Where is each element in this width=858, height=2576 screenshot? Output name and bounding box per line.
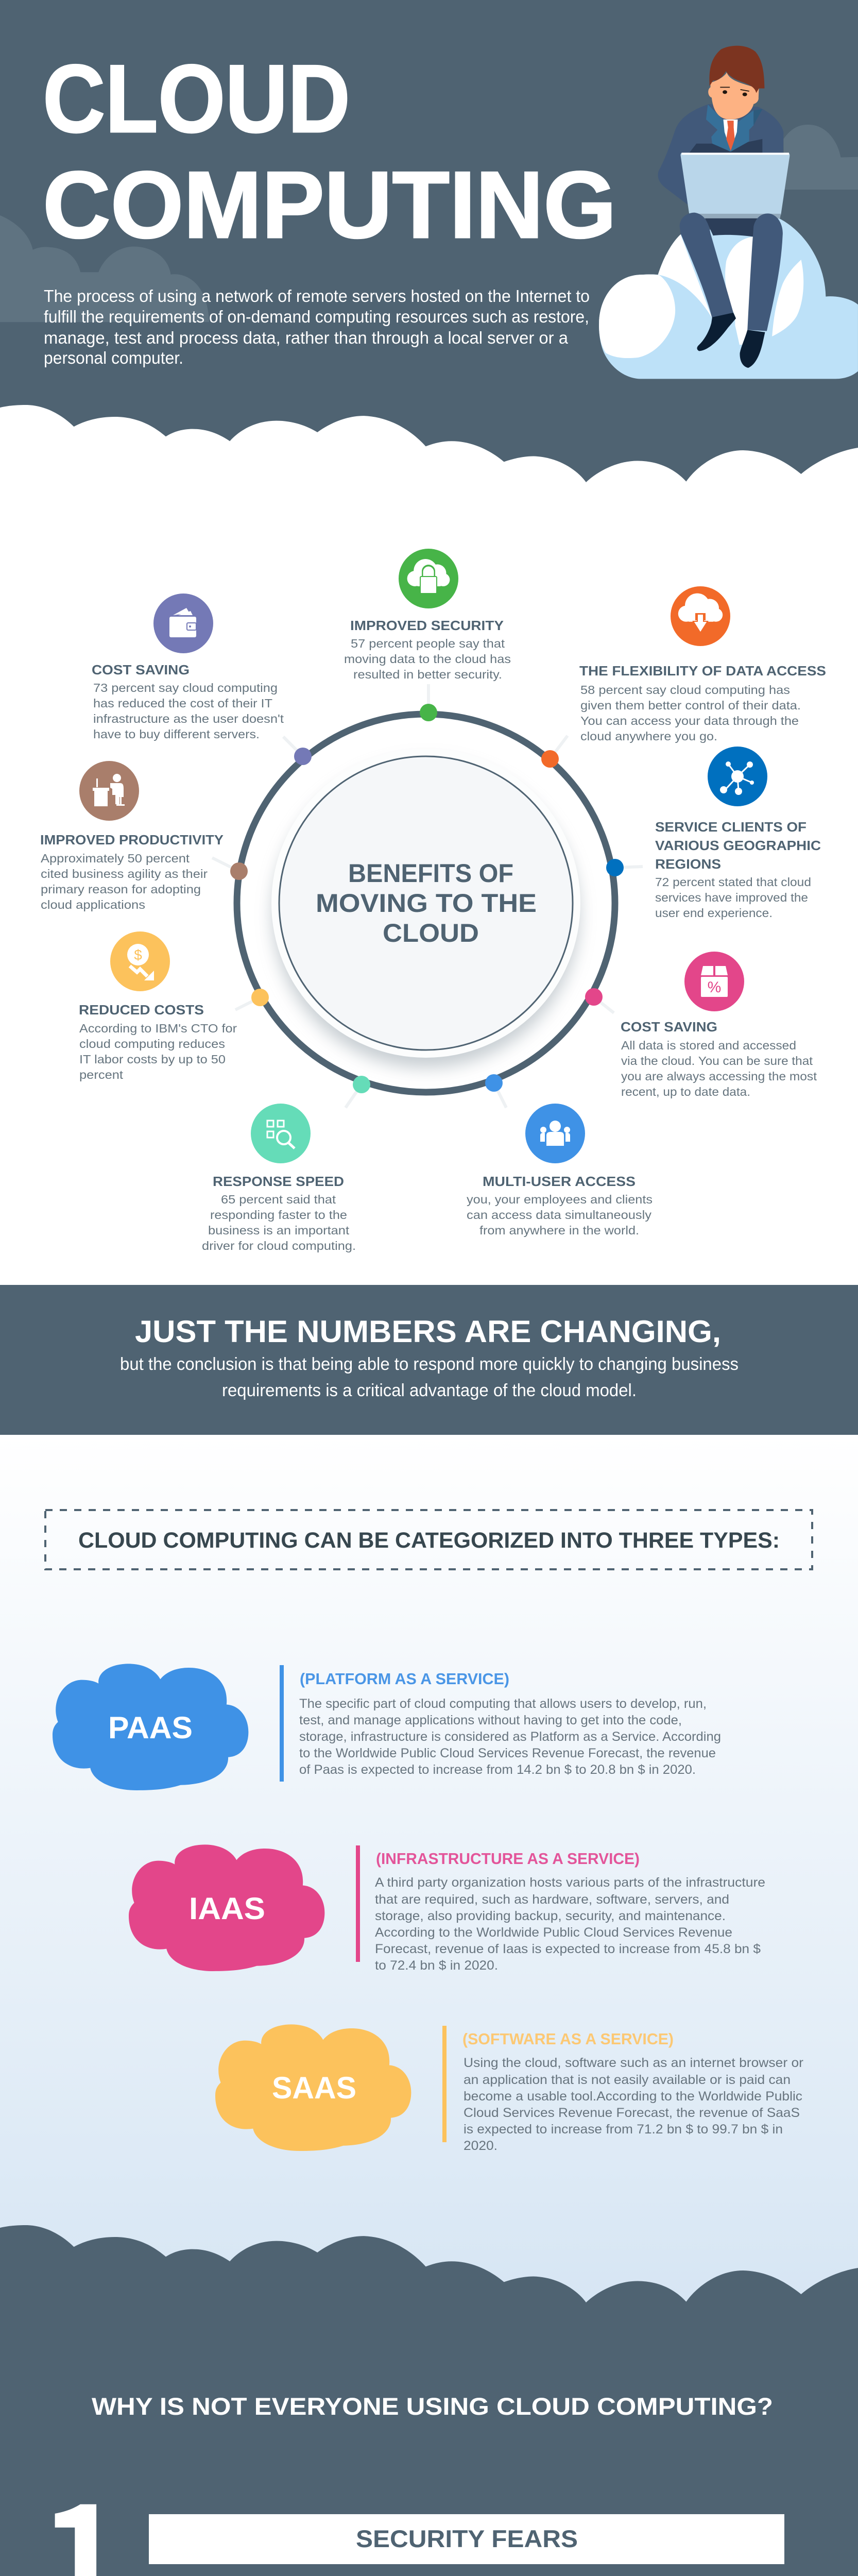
saas text: (SOFTWARE AS A SERVICE) xyxy=(462,2030,674,2048)
text: flexibility of data access: You can access your data through the xyxy=(580,714,799,727)
text: response speed: RESPONSE SPEED xyxy=(213,1174,344,1189)
security fears xyxy=(149,2514,784,2576)
icon: box with percent xyxy=(684,952,744,1011)
icon: coin falling xyxy=(110,931,170,991)
saas cloud: SAAS xyxy=(272,2071,356,2105)
icon: network xyxy=(708,747,767,806)
text: cost saving: All data is stored and accessed xyxy=(621,1039,796,1052)
iaas text: (INFRASTRUCTURE AS A SERVICE) xyxy=(376,1850,640,1868)
iaas cloud: IAAS xyxy=(189,1891,265,1926)
saas text xyxy=(442,2026,803,2153)
text: response speed: business is an important xyxy=(208,1224,350,1237)
text: service clients: VARIOUS GEOGRAPHIC xyxy=(655,838,821,853)
connector lines xyxy=(212,684,643,1108)
intro text: fulfill the requirements of on-demand computing resources such as restore, xyxy=(44,307,589,326)
text: flexibility of data access: given them better control of their data. xyxy=(580,699,801,712)
paas text: (PLATFORM AS A SERVICE) xyxy=(300,1670,509,1688)
text: reduced costs: percent xyxy=(79,1068,124,1081)
white cloud edge xyxy=(0,405,858,515)
iaas text: that are required, such as hardware, software, servers, and xyxy=(375,1892,729,1907)
text: multi-user access: from anywhere in the world. xyxy=(479,1224,639,1237)
band text: requirements is a critical advantage of the cloud model. xyxy=(222,1381,637,1400)
text: improved productivity: IMPROVED PRODUCTIVITY xyxy=(40,832,224,848)
text: improved security: IMPROVED SECURITY xyxy=(350,618,504,633)
icon: wallet xyxy=(153,594,213,653)
text: service clients xyxy=(655,819,821,920)
text: service clients: services have improved the xyxy=(655,891,808,904)
iaas text xyxy=(356,1845,765,1973)
text: improved productivity: Approximately 50 percent xyxy=(41,852,190,865)
dashed title box: CLOUD COMPUTING CAN BE CATEGORIZED INTO THREE TYPES: xyxy=(78,1528,780,1553)
centre title xyxy=(316,859,537,947)
paas cloud xyxy=(53,1664,248,1790)
dashed title box xyxy=(45,1510,812,1569)
title: CLOUD xyxy=(43,45,350,152)
security fears: SECURITY FEARS xyxy=(356,2525,578,2552)
iaas text: Forecast, revenue of Iaas is expected to increase from 45.8 bn $ xyxy=(375,1942,761,1956)
heading: JUST THE NUMBERS ARE CHANGING, xyxy=(135,1314,721,1349)
saas text: an application that is not easily available or is paid can xyxy=(464,2073,791,2087)
text: cost saving: recent, up to date data. xyxy=(621,1085,750,1098)
title xyxy=(43,45,616,258)
text: cost saving: infrastructure as the user doesn't xyxy=(93,712,284,725)
centre disc xyxy=(271,749,580,1058)
panel: just the numbers band xyxy=(0,1285,858,1435)
ring dots xyxy=(230,704,624,1093)
icon: person at desk xyxy=(79,761,139,821)
text: service clients: REGIONS xyxy=(655,856,721,872)
text: multi-user access: MULTI-USER ACCESS xyxy=(483,1174,636,1189)
iaas text: storage, also providing backup, security, and maintenance. xyxy=(375,1909,726,1923)
intro text: personal computer. xyxy=(44,348,183,367)
text: multi-user access xyxy=(467,1174,653,1237)
background cloud left xyxy=(0,215,209,322)
heading: WHY IS NOT EVERYONE USING CLOUD COMPUTING? xyxy=(92,2393,773,2420)
panel: benefits of moving to the cloud xyxy=(40,549,826,1252)
intro text: manage, test and process data, rather than through a local server or a xyxy=(44,328,569,347)
paas text: to the Worldwide Public Cloud Services Revenue Forecast, the revenue xyxy=(299,1746,716,1760)
intro text xyxy=(44,286,590,367)
text: improved security xyxy=(344,618,511,681)
text: improved productivity xyxy=(40,832,224,911)
centre disc shadow xyxy=(272,761,579,1068)
paas text: of Paas is expected to increase from 14.2 bn $ to 20.8 bn $ in 2020. xyxy=(299,1762,696,1777)
text: flexibility of data access: THE FLEXIBILITY OF DATA ACCESS xyxy=(579,663,826,679)
saas text: is expected to increase from 71.2 bn $ to 99.7 bn $ in xyxy=(464,2122,783,2137)
paas text: test, and manage applications without having to get into the code, xyxy=(299,1713,682,1727)
intro text: The process of using a network of remote servers hosted on the Internet to xyxy=(44,286,590,306)
centre title: BENEFITS OF xyxy=(348,859,513,888)
text: multi-user access: you, your employees and clients xyxy=(467,1193,653,1206)
saas text: Cloud Services Revenue Forecast, the revenue of SaaS xyxy=(464,2106,800,2120)
paas cloud: PAAS xyxy=(108,1710,193,1745)
title: COMPUTING xyxy=(43,151,616,258)
text: service clients: user end experience. xyxy=(655,906,773,920)
text: cost saving: you are always accessing the most xyxy=(621,1070,817,1083)
icon: qr search xyxy=(251,1104,311,1163)
text: improved productivity: primary reason for adopting xyxy=(41,883,201,896)
text: improved security: 57 percent people say that xyxy=(351,637,505,650)
text: cost saving: COST SAVING xyxy=(92,662,190,677)
text: reduced costs: REDUCED COSTS xyxy=(79,1002,204,1018)
saas cloud xyxy=(215,2024,411,2151)
text: response speed: 65 percent said that xyxy=(221,1193,336,1206)
text: cost saving: 73 percent say cloud computing xyxy=(93,681,278,694)
saas text: Using the cloud, software such as an internet browser or xyxy=(464,2056,803,2070)
panel: hero header xyxy=(0,0,858,515)
text: cost saving xyxy=(621,1019,817,1098)
text: response speed xyxy=(202,1174,356,1252)
iaas text: A third party organization hosts various parts of the infrastructure xyxy=(375,1875,765,1890)
iaas text: to 72.4 bn $ in 2020. xyxy=(375,1958,498,1973)
text: improved security: moving data to the cloud has xyxy=(344,652,511,666)
panel: three cloud types xyxy=(0,1435,858,2362)
text: reduced costs xyxy=(79,1002,237,1081)
centre title: CLOUD xyxy=(383,919,479,947)
iaas text: According to the Worldwide Public Cloud Services Revenue xyxy=(375,1925,732,1940)
text: flexibility of data access: 58 percent say cloud computing has xyxy=(580,683,790,697)
icon: cloud lock xyxy=(399,549,458,608)
text: response speed: responding faster to the xyxy=(210,1208,347,1222)
saas text: 2020. xyxy=(464,2139,497,2153)
text: service clients: SERVICE CLIENTS OF xyxy=(655,819,806,835)
illustration: man with laptop on cloud xyxy=(599,46,858,379)
panel: why not everyone and facts xyxy=(0,2225,858,2576)
text: response speed: driver for cloud computing. xyxy=(202,1239,356,1252)
text: improved productivity: cited business agility as their xyxy=(41,867,208,880)
dark cloud edge xyxy=(0,2225,858,2335)
text: cost saving: have to buy different servers. xyxy=(93,727,260,741)
icon: box with percent: % xyxy=(708,979,721,996)
text: cost saving: via the cloud. You can be sure that xyxy=(621,1054,813,1067)
icon: users xyxy=(525,1104,585,1163)
text: cost saving: has reduced the cost of their IT xyxy=(93,697,272,710)
centre title: MOVING TO THE xyxy=(316,889,537,918)
text: reduced costs: cloud computing reduces xyxy=(79,1037,225,1050)
text: cost saving xyxy=(92,662,284,741)
text: flexibility of data access: cloud anywhere you go. xyxy=(580,730,717,743)
icon: cloud download xyxy=(671,586,730,646)
text: multi-user access: can access data simultaneously xyxy=(467,1208,652,1222)
text: flexibility of data access xyxy=(579,663,826,743)
icon: coin falling: $ xyxy=(134,947,142,963)
text: cost saving: COST SAVING xyxy=(621,1019,717,1035)
band text: but the conclusion is that being able to respond more quickly to changing business xyxy=(120,1354,739,1374)
text: improved security: resulted in better security. xyxy=(353,668,502,681)
paas text: The specific part of cloud computing that allows users to develop, run, xyxy=(299,1697,707,1711)
text: reduced costs: IT labor costs by up to 50 xyxy=(79,1053,226,1066)
text: improved productivity: cloud applications xyxy=(41,898,145,911)
saas text: become a usable tool.According to the Worldwide Public xyxy=(464,2089,802,2104)
paas text: storage, infrastructure is considered as Platform as a Service. According xyxy=(299,1730,721,1744)
band text xyxy=(120,1354,739,1400)
ring xyxy=(237,714,615,1092)
text: reduced costs: According to IBM's CTO for xyxy=(79,1022,237,1035)
text: service clients: 72 percent stated that cloud xyxy=(655,875,811,889)
paas text xyxy=(280,1665,721,1782)
iaas cloud xyxy=(129,1844,324,1971)
background cloud right xyxy=(783,125,858,190)
